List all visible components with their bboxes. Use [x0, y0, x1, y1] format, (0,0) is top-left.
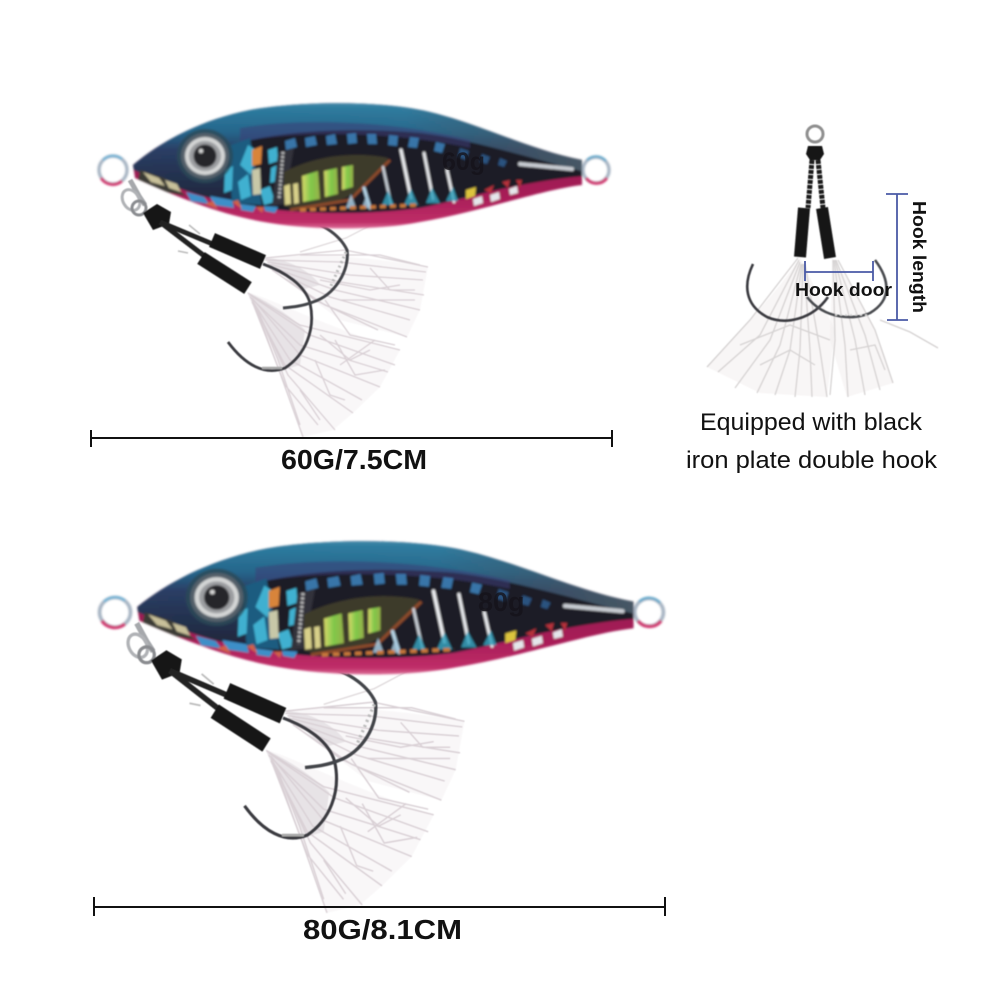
80g lure body: [100, 536, 663, 675]
hook caption: [686, 409, 938, 474]
detail hooks, tubes and ring: [747, 126, 886, 321]
hook caption: iron plate double hook: [686, 447, 938, 474]
hook door measurement: Hook door: [795, 280, 892, 300]
80g length dimension line: [94, 897, 665, 916]
80g body marking: 80g: [478, 587, 525, 617]
detail feathers: [707, 257, 938, 397]
panel: 60g lure: [99, 98, 609, 437]
panel: 80g lure: [100, 536, 663, 913]
80g size label: 80G/8.1CM: [303, 914, 462, 945]
60g lure rig: assist hooks and feathers: [119, 180, 428, 437]
60g size label: 60G/7.5CM: [281, 444, 427, 475]
80g lure rig: assist hooks and feathers: [124, 623, 465, 913]
hook length measurement: Hook length: [909, 201, 929, 313]
60g body marking: 60g: [442, 148, 485, 176]
60g length dimension line: [91, 430, 612, 447]
panel: double hook detail: [707, 126, 938, 397]
hook door measurement: [795, 261, 892, 300]
60g lure body: [99, 98, 609, 229]
hook caption: Equipped with black: [700, 409, 923, 436]
hook length measurement: [886, 194, 929, 320]
